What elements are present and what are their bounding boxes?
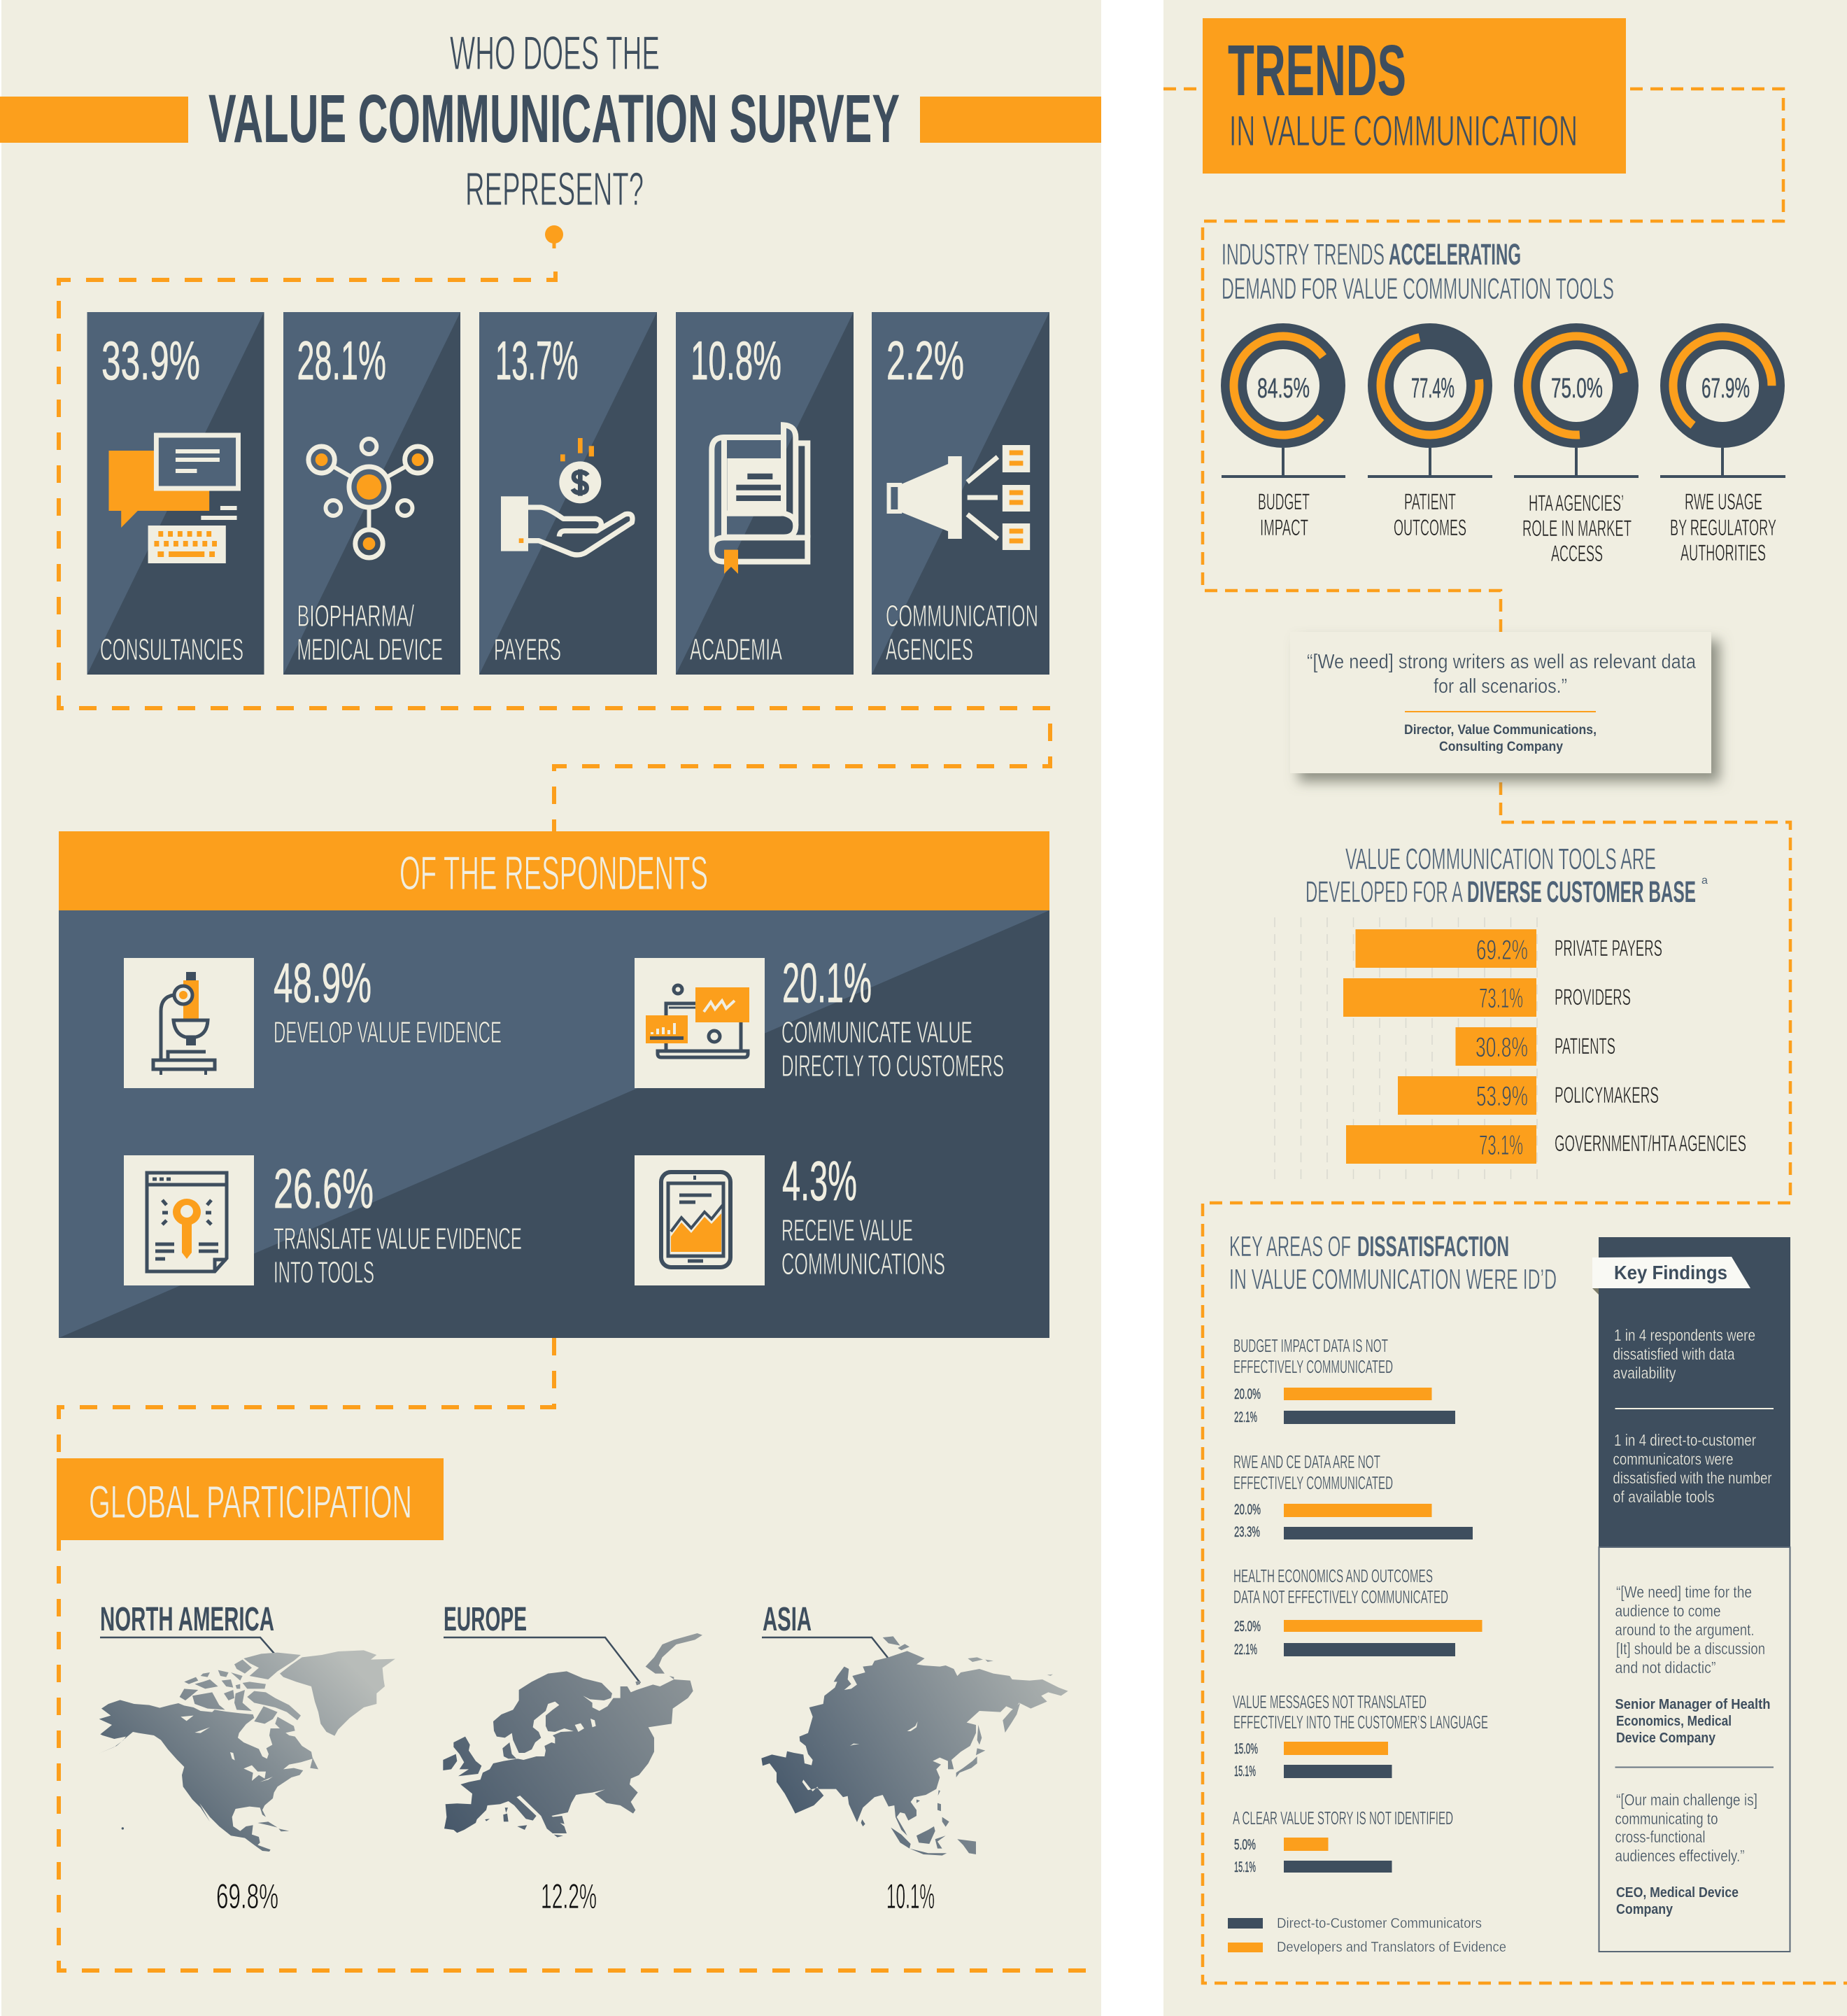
card: communication agencies <box>872 312 1049 675</box>
legend: Developers and Translators of Evidence <box>1277 1940 1506 1955</box>
chart: budget impact data: BUDGET IMPACT DATA IS NOT <box>1233 1335 1388 1356</box>
map: europe <box>443 1601 702 1916</box>
finding 2: 1 in 4 direct-to-customer <box>1614 1431 1756 1449</box>
finding 1 <box>1613 1326 1755 1382</box>
finding 1: availability <box>1613 1364 1676 1382</box>
gauge: budget impact <box>1214 316 1352 540</box>
chart: rwe and ce data: EFFECTIVELY COMMUNICATED <box>1233 1472 1393 1493</box>
gauge: hta agencies <box>1514 323 1639 566</box>
chart: budget impact data <box>1233 1335 1455 1425</box>
gauge: budget impact: IMPACT <box>1260 515 1308 540</box>
chart: health economics: HEALTH ECONOMICS AND OUTCOMES <box>1233 1565 1433 1586</box>
title bar right <box>920 97 1101 143</box>
chart: rwe and ce data <box>1233 1451 1473 1540</box>
banner: trends: TRENDS <box>1228 30 1406 111</box>
chart: budget impact data: 22.1% <box>1234 1409 1257 1425</box>
panel: diverse customer base <box>1275 843 1746 1183</box>
card: payers <box>479 312 657 675</box>
title line 2: VALUE COMMUNICATION SURVEY <box>208 80 900 157</box>
gauge: budget impact: 84.5% <box>1257 373 1310 404</box>
chart: budget impact data: EFFECTIVELY COMMUNICATED <box>1233 1356 1393 1377</box>
gauge: rwe usage: 67.9% <box>1701 373 1750 404</box>
bar chart: customer base <box>1275 917 1746 1183</box>
map: asia: 10.1% <box>886 1877 935 1916</box>
quote: senior manager: “[We need] time for the <box>1616 1583 1752 1601</box>
gauge: hta agencies: 75.0% <box>1551 373 1603 404</box>
quote: senior manager <box>1615 1583 1770 1746</box>
map: asia: ASIA <box>763 1601 812 1638</box>
chart: health economics: 25.0% <box>1234 1619 1261 1635</box>
sidebar outline block <box>1599 1547 1790 1952</box>
heading: customer base <box>1305 843 1708 909</box>
icon: book <box>712 425 807 574</box>
card: biopharma: 28.1% <box>297 330 386 391</box>
finding 1: 1 in 4 respondents were <box>1614 1326 1755 1344</box>
card: academia: ACADEMIA <box>690 633 782 667</box>
icon: chat, monitor, keyboard <box>108 435 238 563</box>
heading: industry trends: INDUSTRY TRENDS <box>1222 238 1385 272</box>
item: develop value evidence: DEVELOP VALUE EVIDENCE <box>274 1015 502 1050</box>
icon: megaphone <box>889 445 1030 550</box>
chart: rwe and ce data: 20.0% <box>1234 1502 1261 1518</box>
quote: senior manager: audience to come <box>1615 1602 1721 1620</box>
finding 2: of available tools <box>1613 1488 1714 1506</box>
chart: value messages: EFFECTIVELY INTO THE CUSTOMER’S LANGUAGE <box>1233 1712 1488 1733</box>
card: payers: 13.7% <box>495 330 578 391</box>
heading band <box>59 831 1049 910</box>
icon: document with key <box>147 1173 227 1271</box>
callout: director quote: Director, Value Communications, <box>1404 723 1597 738</box>
icon: tablet with chart <box>661 1172 730 1267</box>
quote: senior manager: Economics, Medical <box>1616 1714 1732 1729</box>
map: europe: EUROPE <box>444 1601 527 1638</box>
heading: dissatisfaction: DISSATISFACTION <box>1357 1230 1509 1262</box>
gauge: rwe usage <box>1653 316 1792 565</box>
item: translate value evidence: INTO TOOLS <box>274 1255 374 1290</box>
ribbon: key findings: Key Findings <box>1614 1262 1727 1283</box>
item: translate value evidence: TRANSLATE VALUE EVIDENCE <box>274 1222 522 1256</box>
legend: Direct-to-Customer Communicators <box>1277 1916 1482 1931</box>
card: academia: 10.8% <box>691 330 781 391</box>
panel: respondent organisation cards <box>87 312 1049 675</box>
chart: health economics <box>1233 1565 1482 1658</box>
item: translate value evidence <box>124 1155 522 1290</box>
gauge: hta agencies: HTA AGENCIES’ <box>1529 491 1624 516</box>
gauge: patient outcomes: 77.4% <box>1411 373 1455 404</box>
gauge: patient outcomes: PATIENT <box>1404 489 1456 514</box>
chart: value messages: VALUE MESSAGES NOT TRANSLATED <box>1233 1691 1427 1712</box>
bar chart: customer base: 73.1% <box>1479 983 1523 1014</box>
heading: dissatisfaction <box>1229 1230 1557 1295</box>
card: biopharma: MEDICAL DEVICE <box>297 633 443 667</box>
gauge: patient outcomes <box>1368 323 1492 540</box>
item: develop value evidence <box>124 952 502 1088</box>
heading: global participation <box>57 1458 444 1540</box>
heading: dissatisfaction: IN VALUE COMMUNICATION WERE ID’D <box>1229 1263 1557 1295</box>
gauge: budget impact: BUDGET <box>1258 489 1310 514</box>
quote: senior manager: [It] should be a discussion <box>1616 1640 1765 1658</box>
card: biopharma <box>283 312 460 675</box>
gauge: patient outcomes: OUTCOMES <box>1394 515 1466 540</box>
connector: left dashed path bottom <box>59 1338 1101 1971</box>
panel: of the respondents <box>59 831 1049 1338</box>
heading: industry trends <box>1222 238 1614 306</box>
bar chart: customer base: 30.8% <box>1476 1032 1528 1063</box>
title line 3: REPRESENT? <box>465 163 644 216</box>
quote: ceo: CEO, Medical Device <box>1616 1885 1739 1901</box>
panel: industry trends <box>1214 238 1792 566</box>
item: receive value communications: 4.3% <box>782 1150 857 1212</box>
chart: rwe and ce data: 23.3% <box>1234 1524 1260 1540</box>
icon: microscope <box>153 972 215 1075</box>
card: communication agencies: COMMUNICATION <box>886 599 1038 633</box>
gauge: rwe usage: RWE USAGE <box>1685 489 1762 514</box>
divider <box>1615 1766 1774 1768</box>
card: consultancies: CONSULTANCIES <box>100 633 243 667</box>
title bar left <box>0 97 188 143</box>
quote: senior manager: Senior Manager of Health <box>1615 1697 1770 1712</box>
legend <box>1228 1916 1506 1955</box>
quote: senior manager: Device Company <box>1616 1730 1716 1746</box>
panel: key areas of dissatisfaction <box>1228 1230 1557 1955</box>
quote: senior manager: around to the argument. <box>1615 1621 1755 1639</box>
quote: ceo: Company <box>1616 1902 1673 1917</box>
finding 1: dissatisfied with data <box>1613 1345 1735 1363</box>
banner: trends: IN VALUE COMMUNICATION <box>1229 107 1578 155</box>
callout: director quote: Consulting Company <box>1439 740 1563 754</box>
card: payers: PAYERS <box>494 633 561 667</box>
finding 2 <box>1613 1431 1772 1506</box>
chart: clear value story: 15.1% <box>1234 1859 1256 1875</box>
chart: budget impact data: 20.0% <box>1234 1386 1261 1402</box>
callout: director quote <box>1290 632 1711 773</box>
bar chart: customer base: 69.2% <box>1476 935 1528 966</box>
card: biopharma: BIOPHARMA/ <box>297 599 414 633</box>
chart: health economics: DATA NOT EFFECTIVELY COMMUNICATED <box>1233 1586 1448 1607</box>
panel background with diagonal <box>59 910 1049 1338</box>
heading band: OF THE RESPONDENTS <box>399 847 708 900</box>
title block <box>0 27 1101 248</box>
sidebar dark block <box>1599 1237 1790 1547</box>
chart: health economics: 22.1% <box>1234 1642 1257 1658</box>
map: north america <box>99 1601 395 1916</box>
card: communication agencies: AGENCIES <box>886 633 973 667</box>
item: communicate value: 20.1% <box>782 952 872 1014</box>
card: consultancies: 33.9% <box>101 330 200 391</box>
bar chart: customer base: 53.9% <box>1476 1081 1528 1112</box>
gauge: hta agencies: ROLE IN MARKET <box>1522 516 1632 541</box>
panel: global participation <box>57 1458 1068 1916</box>
finding 2: dissatisfied with the number <box>1613 1469 1772 1487</box>
gauge: hta agencies: ACCESS <box>1551 541 1603 566</box>
card: communication agencies: 2.2% <box>886 330 964 391</box>
gauge: rwe usage: AUTHORITIES <box>1680 540 1766 565</box>
bar chart: customer base: PRIVATE PAYERS <box>1555 936 1662 961</box>
quote: ceo: cross-functional <box>1615 1828 1706 1846</box>
connector: right dashed path middle <box>1203 782 1847 1983</box>
map: europe: 12.2% <box>541 1877 597 1916</box>
icon: hand holding coin <box>501 438 632 555</box>
icon: laptop with charts <box>646 985 749 1057</box>
quote: ceo: communicating to <box>1615 1810 1718 1828</box>
item: communicate value <box>635 952 1004 1088</box>
bar chart: customer base: POLICYMAKERS <box>1555 1083 1659 1108</box>
item: develop value evidence: 48.9% <box>274 952 371 1014</box>
map: north america: NORTH AMERICA <box>100 1601 274 1638</box>
quote: ceo <box>1615 1791 1757 1917</box>
heading: industry trends: ACCELERATING <box>1389 238 1521 272</box>
quote: ceo: “[Our main challenge is] <box>1616 1791 1757 1809</box>
heading: dissatisfaction: KEY AREAS OF <box>1229 1230 1351 1262</box>
title line 1: WHO DOES THE <box>450 27 660 80</box>
chart: clear value story: 5.0% <box>1234 1837 1256 1853</box>
item: receive value communications: COMMUNICATIONS <box>781 1247 945 1281</box>
ribbon: key findings <box>1592 1257 1750 1295</box>
banner: trends <box>1203 18 1626 174</box>
map: asia <box>761 1601 1068 1916</box>
chart: value messages: 15.1% <box>1234 1763 1256 1779</box>
connector: right dashed path top <box>1163 89 1783 633</box>
chart: clear value story: A CLEAR VALUE STORY IS NOT IDENTIFIED <box>1233 1807 1453 1828</box>
icon: molecule network <box>309 439 431 558</box>
divider <box>1615 1408 1774 1409</box>
chart: value messages <box>1233 1691 1488 1779</box>
item: receive value communications <box>635 1150 945 1285</box>
chart: rwe and ce data: RWE AND CE DATA ARE NOT <box>1233 1451 1380 1472</box>
callout: director quote: for all scenarios.” <box>1434 675 1567 698</box>
panel: right background <box>1163 0 1847 2016</box>
quote: senior manager: and not didactic” <box>1615 1658 1715 1677</box>
connector: left dashed path top <box>59 272 1050 831</box>
card: academia <box>676 312 854 675</box>
chart: clear value story <box>1233 1807 1453 1875</box>
item: translate value evidence: 26.6% <box>274 1157 374 1220</box>
callout: director quote: “[We need] strong writers as well as relevant data <box>1307 651 1697 673</box>
chart: value messages: 15.0% <box>1234 1741 1258 1757</box>
bar chart: customer base: PROVIDERS <box>1555 985 1631 1010</box>
map: north america: 69.8% <box>216 1877 278 1916</box>
item: communicate value: DIRECTLY TO CUSTOMERS <box>781 1049 1004 1083</box>
sidebar: key findings <box>1592 1237 1790 1952</box>
icon: pin <box>545 225 563 248</box>
item: receive value communications: RECEIVE VALUE <box>781 1213 913 1248</box>
card: consultancies <box>87 312 264 675</box>
quote: ceo: audiences effectively.” <box>1615 1847 1745 1865</box>
bar chart: customer base: PATIENTS <box>1555 1034 1615 1059</box>
heading: customer base: DEVELOPED FOR A <box>1305 875 1463 909</box>
bar chart: customer base: 73.1% <box>1479 1130 1523 1161</box>
heading: global participation: GLOBAL PARTICIPATION <box>89 1476 412 1528</box>
item: communicate value: COMMUNICATE VALUE <box>781 1015 972 1050</box>
finding 2: communicators were <box>1613 1450 1734 1468</box>
panel: left background <box>1 0 1101 2016</box>
heading: customer base: a <box>1701 875 1708 887</box>
